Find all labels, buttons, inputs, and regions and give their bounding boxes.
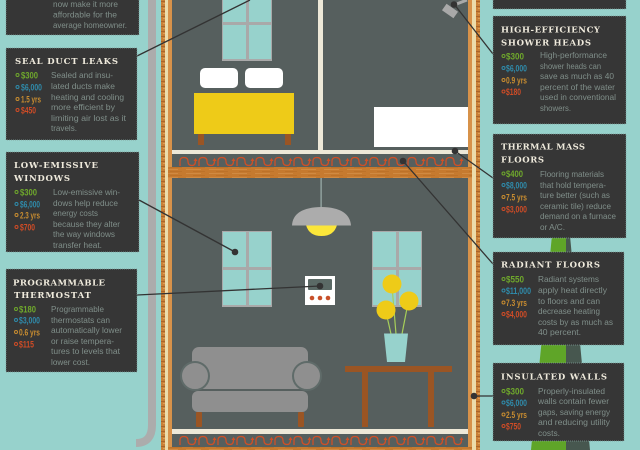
panel: seal duct leaks: more efficient by (51, 102, 116, 112)
panel: low-emissive windows: $300 (20, 188, 37, 198)
panel: thermal mass floors: ture better (such as (540, 190, 610, 200)
panel: seal duct leaks: $450 (21, 106, 36, 116)
panel: radiant floors: $550 (506, 274, 524, 284)
panel: insulated walls: costs. (538, 428, 560, 438)
flowers in vase (376, 274, 418, 362)
panel: high-efficiency shower heads: $300 (506, 52, 524, 62)
panel: insulated walls: INSULATED WALLS (501, 372, 607, 382)
panel: low-emissive windows: transfer heat. (53, 240, 102, 250)
panel: insulated walls: Properly-insulated (538, 386, 605, 396)
lower left window (222, 231, 272, 307)
panel: top left card (cropped): affordable for the (53, 10, 117, 20)
sofa (181, 347, 321, 427)
panel: high-efficiency shower heads: High-performance (540, 50, 607, 60)
panel: high-efficiency shower heads (493, 16, 626, 124)
panel: programmable thermostat: thermostats can (51, 315, 110, 325)
upper window (222, 0, 272, 61)
panel: thermal mass floors: Flooring materials (540, 169, 604, 179)
panel: low-emissive windows: energy costs (53, 208, 98, 218)
panel: seal duct leaks: $300 (21, 70, 38, 80)
panel: thermal mass floors: or A/C. (540, 222, 565, 232)
panel: high-efficiency shower heads: SHOWER HEADS (501, 38, 591, 48)
ceiling lamp (292, 178, 351, 236)
downspout (136, 0, 152, 443)
panel: seal duct leaks: SEAL DUCT LEAKS (15, 57, 118, 67)
panel: thermal mass floors: 7.5 yrs (506, 192, 527, 202)
panel: thermal mass floors: demand on a furnace (540, 211, 616, 221)
panel: programmable thermostat: $115 (19, 340, 34, 350)
bed (194, 68, 294, 145)
panel: programmable thermostat: tures to levels that (51, 346, 121, 356)
lower right window (372, 231, 422, 307)
panel: low-emissive windows: the way windows (53, 229, 115, 239)
panel: thermal mass floors: $3,000 (506, 204, 527, 214)
panel: radiant floors: decrease heating (538, 306, 600, 316)
right wall (468, 0, 480, 450)
panel: top left card (cropped) (6, 0, 139, 35)
panel: low-emissive windows: $6,000 (20, 200, 40, 210)
panel: insulated walls: and reducing utility (538, 417, 611, 427)
panel: thermal mass floors (493, 134, 626, 238)
panel: radiant floors: Radiant systems (538, 274, 599, 284)
panel: programmable thermostat: automatically lower (51, 325, 122, 335)
leader dots (232, 1, 477, 399)
panel: high-efficiency shower heads: showers. (540, 103, 571, 113)
panel: programmable thermostat: 0.6 yrs (19, 328, 40, 338)
interior dividing wall (318, 0, 323, 151)
panel: programmable thermostat: lower cost. (51, 357, 90, 367)
panel: seal duct leaks: heating and cooling (51, 92, 124, 102)
panel: low-emissive windows: 2.3 yrs (20, 210, 40, 220)
panel: low-emissive windows: dows help reduce (53, 198, 118, 208)
left wall (161, 0, 172, 450)
panel: radiant floors: $4,000 (506, 310, 527, 320)
panel: high-efficiency shower heads: save as much as 40 (540, 71, 614, 81)
panel: programmable thermostat: THERMOSTAT (14, 291, 92, 301)
panel: insulated walls: 2.5 yrs (506, 410, 527, 420)
panel: radiant floors: RADIANT FLOORS (501, 260, 600, 270)
panel: insulated walls (493, 363, 624, 441)
panel: thermal mass floors: that hold tempera- (540, 180, 606, 190)
panel: radiant floors: 7.3 yrs (506, 298, 527, 308)
panel: high-efficiency shower heads: $6,000 (506, 64, 527, 74)
panel: programmable thermostat: $3,000 (19, 316, 40, 326)
panel: high-efficiency shower heads: used in conventional (540, 92, 616, 102)
panel: radiant floors (493, 252, 624, 345)
panel: radiant floors: apply heat directly (538, 285, 608, 295)
panel: thermal mass floors: FLOORS (501, 156, 544, 166)
panel: thermal mass floors: ceramic tile) reduce (540, 201, 611, 211)
panel: programmable thermostat (6, 269, 137, 372)
panel: high-efficiency shower heads: shower heads can (540, 61, 601, 71)
panel: radiant floors: to floors and can (538, 296, 600, 306)
interior walls background (172, 0, 468, 450)
panel: insulated walls: $6,000 (506, 398, 527, 408)
panel: insulated walls: $300 (506, 386, 524, 396)
panel: insulated walls: $750 (506, 422, 521, 432)
house (161, 0, 480, 450)
panel: programmable thermostat: PROGRAMMABLE (13, 278, 106, 288)
panel: low-emissive windows (6, 152, 139, 252)
upper floor (168, 150, 472, 178)
panel: low-emissive windows: LOW-EMISSIVE (14, 161, 99, 171)
panel: high-efficiency shower heads: HIGH-EFFICIENCY (501, 26, 601, 36)
panel: seal duct leaks (6, 48, 137, 140)
panel: seal duct leaks: $6,000 (21, 82, 42, 92)
table (345, 366, 452, 427)
panel: programmable thermostat: $180 (19, 304, 36, 314)
lower floor (168, 429, 472, 450)
panel: thermal mass floors: THERMAL MASS (501, 142, 585, 152)
panel: programmable thermostat: or raise tempera- (51, 336, 114, 346)
panel: high-efficiency shower heads: 0.9 yrs (506, 76, 527, 86)
panel: thermal mass floors: $8,000 (506, 180, 527, 190)
panel: radiant floors: 40 percent. (538, 327, 581, 337)
panel: radiant floors: costs by as much as (538, 317, 613, 327)
white bathtub (374, 107, 468, 147)
panel: seal duct leaks: limiting air lost as it (51, 113, 127, 123)
panel: high-efficiency shower heads: percent of the water (540, 82, 615, 92)
panel: insulated walls: walls contain fewer (537, 396, 609, 406)
shower head (442, 0, 467, 18)
thermostat (305, 276, 335, 305)
panel: insulated walls: gaps, saving energy (538, 407, 611, 417)
panel: radiant floors: $11,000 (506, 286, 531, 296)
panel: low-emissive windows: Low-emissive win- (53, 187, 120, 197)
panel: programmable thermostat: Programmable (51, 304, 104, 314)
panel: top right card (cropped) (493, 0, 626, 9)
panel: high-efficiency shower heads: $180 (506, 87, 521, 97)
panel: top left card (cropped): average homeowner. (53, 20, 127, 30)
panel: seal duct leaks: lated ducts make (51, 81, 115, 91)
leader lines (137, 0, 493, 396)
panel: thermal mass floors: $400 (506, 169, 523, 179)
panel: seal duct leaks: 1.5 yrs (21, 94, 41, 104)
panel: low-emissive windows: $700 (20, 222, 35, 232)
panel: seal duct leaks: Sealed and insu- (51, 70, 113, 80)
panel: low-emissive windows: because they alter (53, 219, 120, 229)
panel: seal duct leaks: travels. (51, 123, 77, 133)
tree behind right cards (531, 225, 590, 450)
panel: low-emissive windows: WINDOWS (13, 174, 70, 184)
